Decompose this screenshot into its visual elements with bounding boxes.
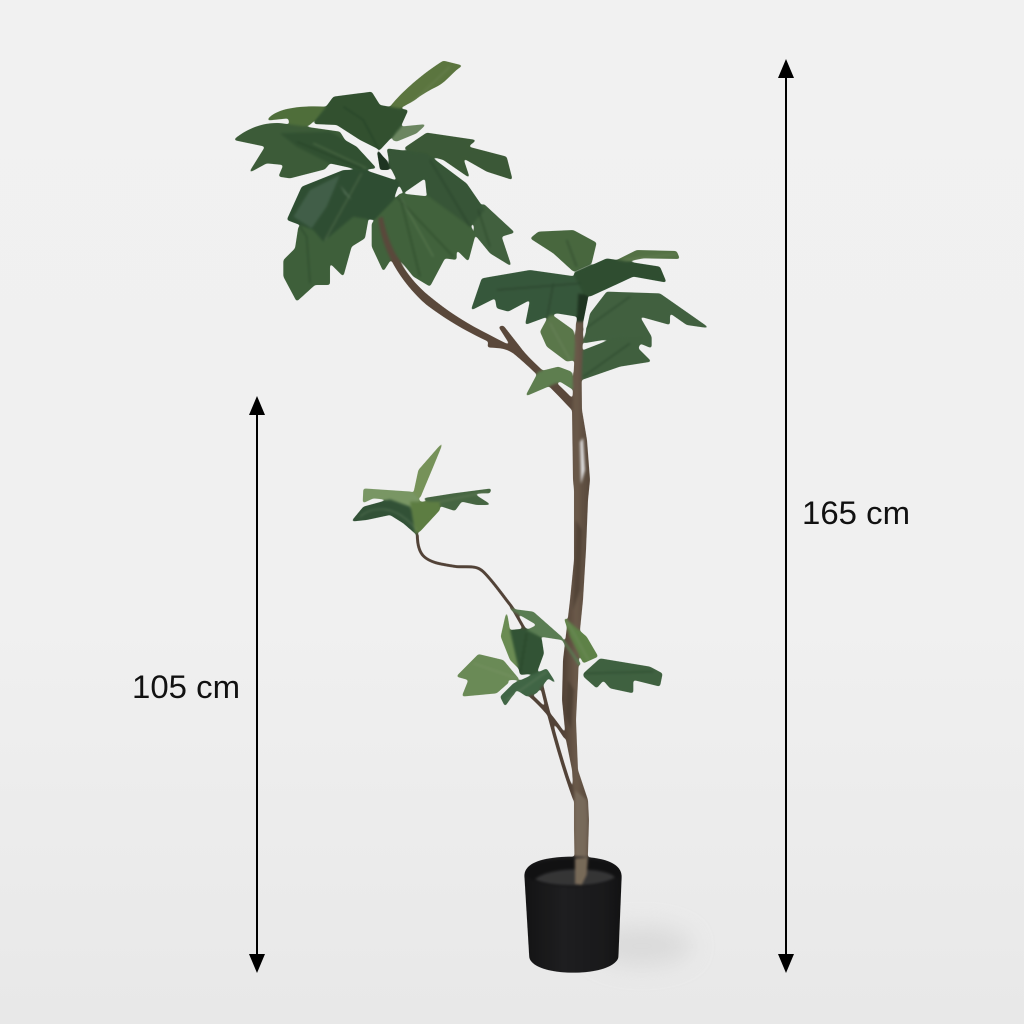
arrow: 165 cm height — [778, 59, 794, 973]
upper leaf crown — [233, 61, 515, 302]
pot — [524, 857, 622, 973]
soil — [535, 869, 615, 885]
lower leaf cluster — [456, 608, 663, 707]
pot shadow — [592, 926, 692, 966]
thin side stem — [417, 535, 525, 630]
mid leaf cluster — [351, 441, 492, 535]
arrow: 105 cm height — [249, 396, 265, 973]
plant — [233, 61, 710, 973]
trunk base — [575, 857, 588, 885]
label: 105 cm: 105 cm — [132, 669, 240, 705]
right leaf cluster — [471, 230, 710, 412]
main trunk — [562, 322, 590, 885]
upper branch — [378, 217, 577, 412]
label: 165 cm: 165 cm — [802, 495, 910, 531]
lower side stems — [530, 683, 575, 800]
pot opening — [526, 858, 621, 887]
